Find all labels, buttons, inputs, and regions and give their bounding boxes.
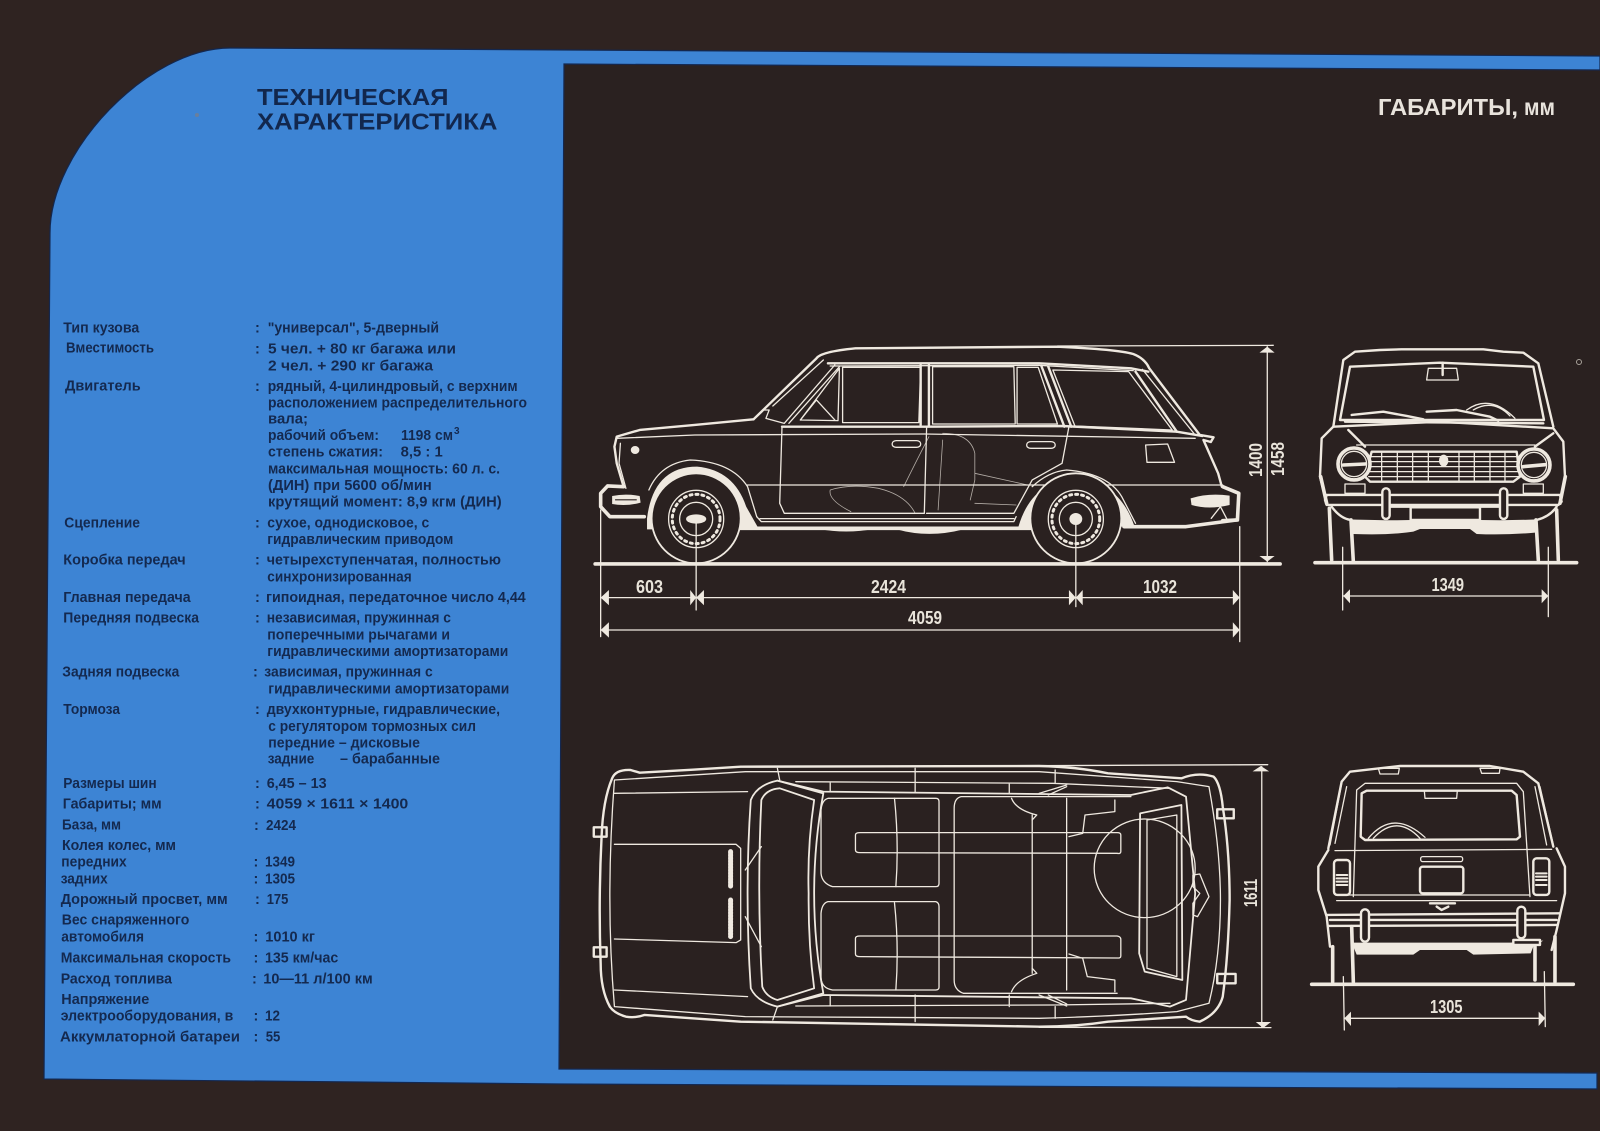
wheels (1333, 927, 1555, 982)
bumper and valance (1327, 907, 1560, 955)
row: ground clearance: 175 (267, 892, 288, 908)
row: top speed: 135 км/час (265, 950, 338, 966)
track dimension (1343, 547, 1548, 617)
roof and rails (773, 768, 1195, 1022)
row: engine: вала; (268, 411, 308, 427)
row: brakes: двухконтурные, гидравлические, (267, 702, 500, 718)
dimension values: side view: 2424 (871, 577, 906, 597)
row: engine: (ДИН) при 5600 об/мин (268, 478, 432, 494)
row: clutch: гидравлическим приводом (267, 532, 453, 548)
bonnet vent (614, 844, 741, 943)
row: track: : (254, 855, 258, 871)
row: kerb weight: : (254, 930, 258, 946)
width dimension (1039, 765, 1271, 1028)
row: overall dimensions: : (255, 797, 260, 813)
ground line (595, 562, 1280, 566)
headlights (1338, 448, 1550, 481)
row: body type (63, 320, 439, 337)
track dimension (1343, 972, 1545, 1030)
heading: dimensions: ГАБАРИТЫ, (1378, 94, 1518, 120)
row: wheelbase: 2424 (266, 818, 296, 834)
row: gearbox: : (255, 553, 260, 569)
row: engine: рядный, 4-цилиндровый, с верхним (268, 379, 518, 395)
row: battery: 55 (266, 1029, 280, 1045)
row: brakes: задние (268, 752, 314, 768)
row: front suspension: : (255, 611, 260, 627)
row: overall dimensions: Габариты; мм (63, 797, 162, 813)
tailgate and lights (1318, 848, 1565, 950)
row: brakes: : (255, 702, 260, 718)
row: ground clearance: : (255, 892, 260, 908)
row: brakes: передние – дисковые (268, 735, 420, 751)
dimension values: side view (636, 442, 1288, 628)
row: engine: : (255, 379, 260, 395)
seats and floor lines (821, 797, 1131, 993)
row: tyre size: : (255, 776, 260, 792)
row: engine: максимальная мощность: 60 л. с. (268, 461, 500, 477)
body outline (594, 766, 1236, 1027)
row: capacity (66, 341, 456, 374)
body outline (614, 347, 1223, 522)
row: voltage: : (254, 1009, 258, 1025)
underside and bumpers (601, 486, 1239, 534)
heading: dimensions: мм (1524, 94, 1555, 120)
row: clutch: : (255, 515, 260, 531)
row: gearbox: Коробка передач (63, 553, 186, 569)
row: gearbox (63, 553, 501, 585)
dimension values: side view: 4059 (908, 608, 942, 628)
title: technical characteristics: ТЕХНИЧЕСКАЯ (257, 84, 448, 110)
row: front suspension: гидравлическими амортизаторами (267, 644, 508, 660)
row: brakes (63, 702, 500, 768)
specification table (60, 320, 527, 1045)
row: body type: Тип кузова (63, 320, 140, 336)
row: fuel use: Расход топлива (61, 971, 173, 987)
row: overall dimensions (63, 797, 408, 813)
bodywork (1320, 422, 1565, 503)
row: gearbox: четырехступенчатая, полностью (267, 553, 501, 569)
row: capacity: 5 чел. + 80 кг багажа или (268, 342, 456, 358)
row: voltage: 12 (265, 1009, 280, 1025)
row: rear suspension (62, 665, 509, 697)
row: battery: : (254, 1029, 258, 1045)
dimension values: side view: 603 (636, 577, 663, 597)
row: fuel use (61, 971, 373, 987)
dimension values: side view: 1032 (1143, 577, 1177, 597)
row: kerb weight: автомобиля (61, 930, 144, 946)
row: rear suspension: : (253, 665, 258, 681)
row: front suspension: Передняя подвеска (63, 611, 200, 627)
fender lips (649, 460, 1136, 523)
wheels (1329, 508, 1558, 562)
front wheel (647, 467, 759, 563)
row: wheelbase: База, мм (62, 817, 121, 833)
row: engine: рабочий объем: (268, 428, 379, 444)
dark panel fill (560, 65, 1600, 1072)
spare wheel (1094, 819, 1195, 918)
row: track: : (254, 871, 258, 887)
row: clutch (64, 515, 453, 548)
top view drawing (594, 765, 1271, 1028)
windows (800, 365, 1177, 432)
row: track: Колея колес, мм (62, 838, 176, 854)
row: overall dimensions: 4059 × 1611 × 1400 (267, 797, 408, 813)
row: top speed: Максимальная скорость (61, 950, 231, 966)
row: track: задних (61, 871, 108, 887)
row: final drive: Главная передача (63, 590, 192, 606)
small ring mark (1576, 360, 1582, 364)
row: clutch: сухое, однодисковое, с (267, 515, 429, 531)
row: wheelbase (62, 817, 296, 834)
row: ground clearance: Дорожный просвет, мм (61, 892, 228, 908)
row: clutch: Сцепление (64, 515, 140, 531)
row: track: передних (61, 855, 127, 871)
ground line (1315, 561, 1577, 564)
row: voltage (61, 992, 280, 1025)
row: track: 1349 (265, 855, 295, 871)
row: voltage: Напряжение (61, 992, 149, 1008)
row: rear suspension: Задняя подвеска (62, 665, 180, 681)
row: brakes: – барабанные (340, 752, 440, 768)
roof and windscreen (1333, 349, 1553, 427)
row: tyre size: 6,45 – 13 (267, 776, 327, 792)
row: tyre size: Размеры шин (63, 776, 157, 792)
row: gearbox: синхронизированная (267, 569, 412, 585)
row: kerb weight (61, 913, 315, 946)
row: rear suspension: зависимая, пружинная с (264, 665, 433, 681)
row: final drive: : (255, 590, 260, 606)
dimension values: side view: 1400 (1246, 443, 1266, 477)
row: body type: "универсал", 5-дверный (268, 321, 439, 337)
row: kerb weight: Вес снаряженного (62, 913, 189, 929)
row: front suspension: независимая, пружинная с (267, 611, 451, 627)
row: battery: Аккумлаторной батареи (60, 1029, 240, 1045)
row: front suspension: поперечными рычагами и (267, 627, 450, 643)
row: tyre size (63, 776, 327, 792)
row: front suspension (63, 611, 508, 660)
doors and handles (631, 427, 1175, 513)
dimension value: front track: 1349 (1432, 575, 1464, 595)
rear view drawing (1312, 766, 1573, 1030)
row: wheelbase: : (254, 818, 259, 834)
row: brakes: Тормоза (63, 702, 121, 718)
front view drawing (1315, 349, 1577, 617)
row: engine: 3 (454, 426, 460, 437)
row: engine: 8,5 : 1 (401, 445, 443, 461)
row: kerb weight: 1010 кг (265, 930, 315, 946)
title: technical characteristics (257, 84, 498, 134)
row: top speed: : (254, 950, 258, 966)
row: engine: Двигатель (65, 379, 141, 395)
speck (195, 113, 199, 117)
ground line (1312, 983, 1573, 986)
rear wheel (1018, 473, 1135, 563)
row: fuel use: : (252, 971, 257, 987)
row: final drive (63, 590, 526, 606)
side view drawing (595, 345, 1280, 642)
title: technical characteristics: ХАРАКТЕРИСТИКА (257, 108, 498, 134)
bumper and valance (1325, 484, 1562, 534)
radiator grille (1365, 452, 1520, 482)
row: brakes: с регулятором тормозных сил (268, 719, 476, 735)
row: top speed (61, 950, 338, 966)
row: engine: 1198 см (401, 428, 453, 444)
row: body type: : (255, 321, 260, 337)
row: capacity: : (255, 342, 260, 358)
row: engine: степень сжатия: (268, 445, 383, 461)
row: voltage: электрооборудования, в (61, 1009, 233, 1025)
row: fuel use: 10—11 л/100 км (263, 971, 373, 987)
tailgate window (1139, 805, 1209, 980)
row: engine: расположением распределительного (268, 395, 527, 411)
row: final drive: гипоидная, передаточное число 4,44 (266, 590, 526, 606)
dimension value: width: 1611 (1241, 879, 1261, 907)
row: capacity: Вместимость (66, 341, 154, 357)
row: engine: крутящий момент: 8,9 кгм (ДИН) (268, 495, 502, 511)
dimension lines (601, 345, 1275, 642)
dimension value: rear track: 1305 (1430, 997, 1462, 1017)
windscreen (745, 781, 823, 1007)
row: capacity: 2 чел. + 290 кг багажа (268, 358, 434, 374)
roof and rear window (1328, 766, 1553, 897)
row: engine (65, 379, 527, 511)
row: rear suspension: гидравлическими амортизаторами (268, 681, 509, 697)
row: track: 1305 (265, 871, 295, 887)
row: track (61, 838, 295, 887)
dimension values: side view: 1458 (1268, 442, 1288, 476)
